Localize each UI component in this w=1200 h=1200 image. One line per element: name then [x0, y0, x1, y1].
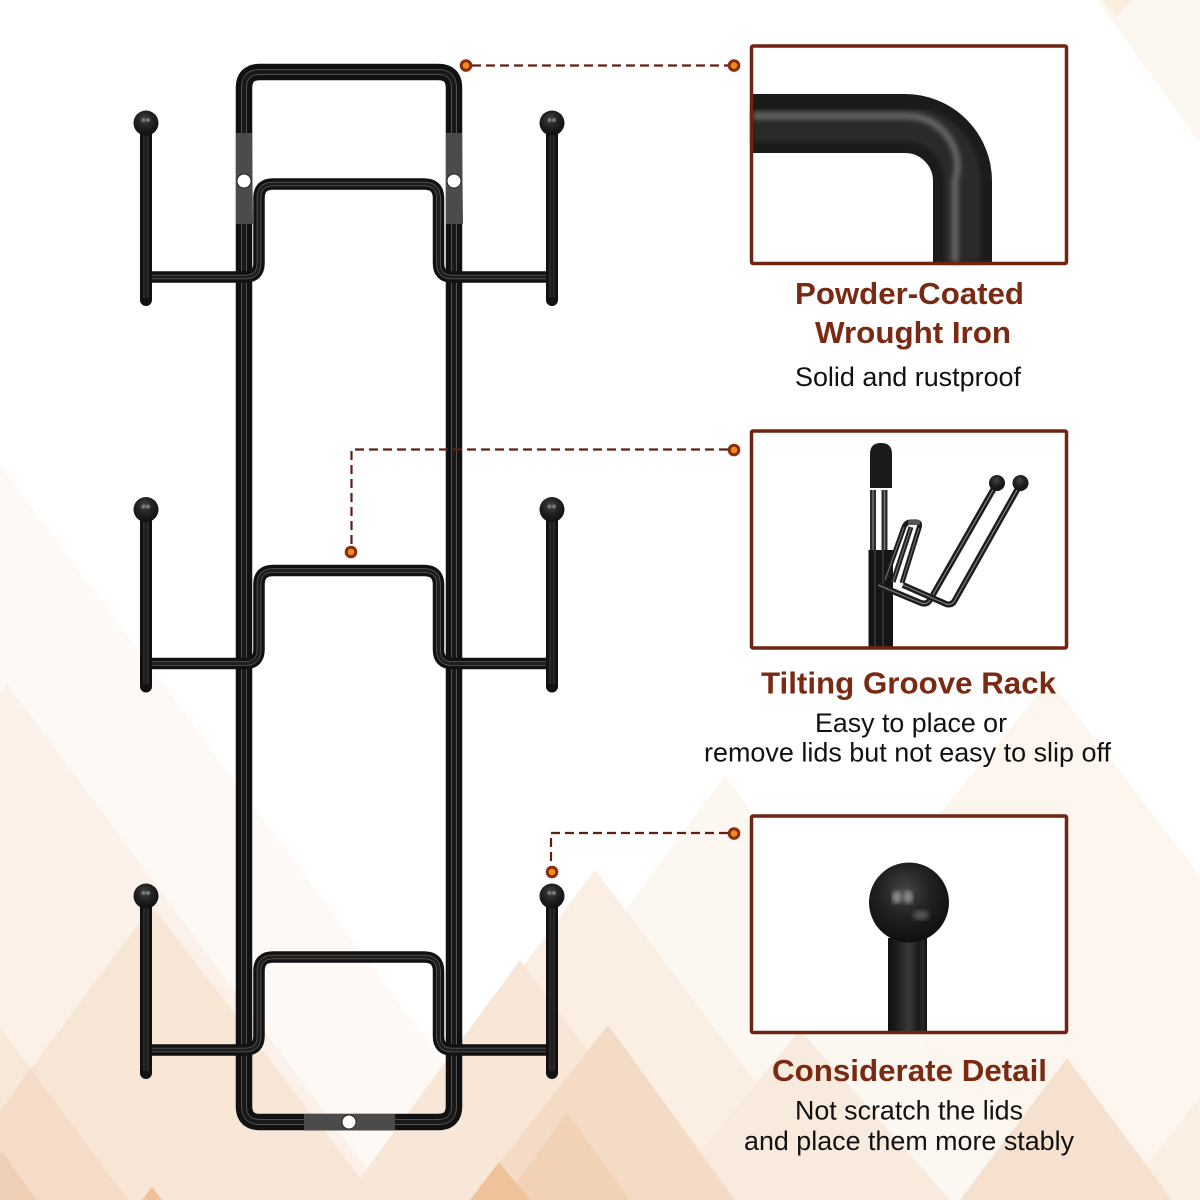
heading: Tilting Groove Rack: Tilting Groove Rack — [761, 666, 1057, 700]
heading: Powder-Coated: Powder-Coated — [795, 276, 1024, 311]
panel: considerate detail — [752, 816, 1066, 1032]
icon: ball tip closeup — [869, 862, 949, 1031]
mounting bracket bottom — [304, 1114, 395, 1130]
text: remove lids but not easy to slip off: remove lids but not easy to slip off — [704, 738, 1112, 768]
icon: side view of rack — [868, 443, 1028, 647]
panel: powder-coated detail — [752, 46, 1066, 264]
icon: bent tube closeup — [753, 116, 962, 262]
callout line 2 — [346, 445, 739, 557]
mounting bracket right — [446, 133, 463, 224]
text: Not scratch the lids: Not scratch the lids — [795, 1096, 1023, 1126]
product: wall-mounted lid rack — [134, 72, 564, 1130]
lid holder middle — [134, 497, 564, 686]
mounting bracket left — [236, 133, 253, 224]
lid holder bottom — [134, 884, 564, 1073]
callout line 3 — [547, 829, 739, 877]
callout line 1 — [461, 61, 739, 70]
text: and place them more stably: and place them more stably — [744, 1126, 1075, 1156]
text: Easy to place or: Easy to place or — [815, 708, 1007, 738]
text: Solid and rustproof: Solid and rustproof — [795, 362, 1022, 392]
panel: tilting groove detail — [752, 431, 1066, 648]
heading: Considerate Detail: Considerate Detail — [772, 1053, 1047, 1088]
heading: Wrought Iron: Wrought Iron — [815, 315, 1011, 350]
rack frame — [244, 72, 454, 1122]
lid holder top — [134, 110, 564, 300]
